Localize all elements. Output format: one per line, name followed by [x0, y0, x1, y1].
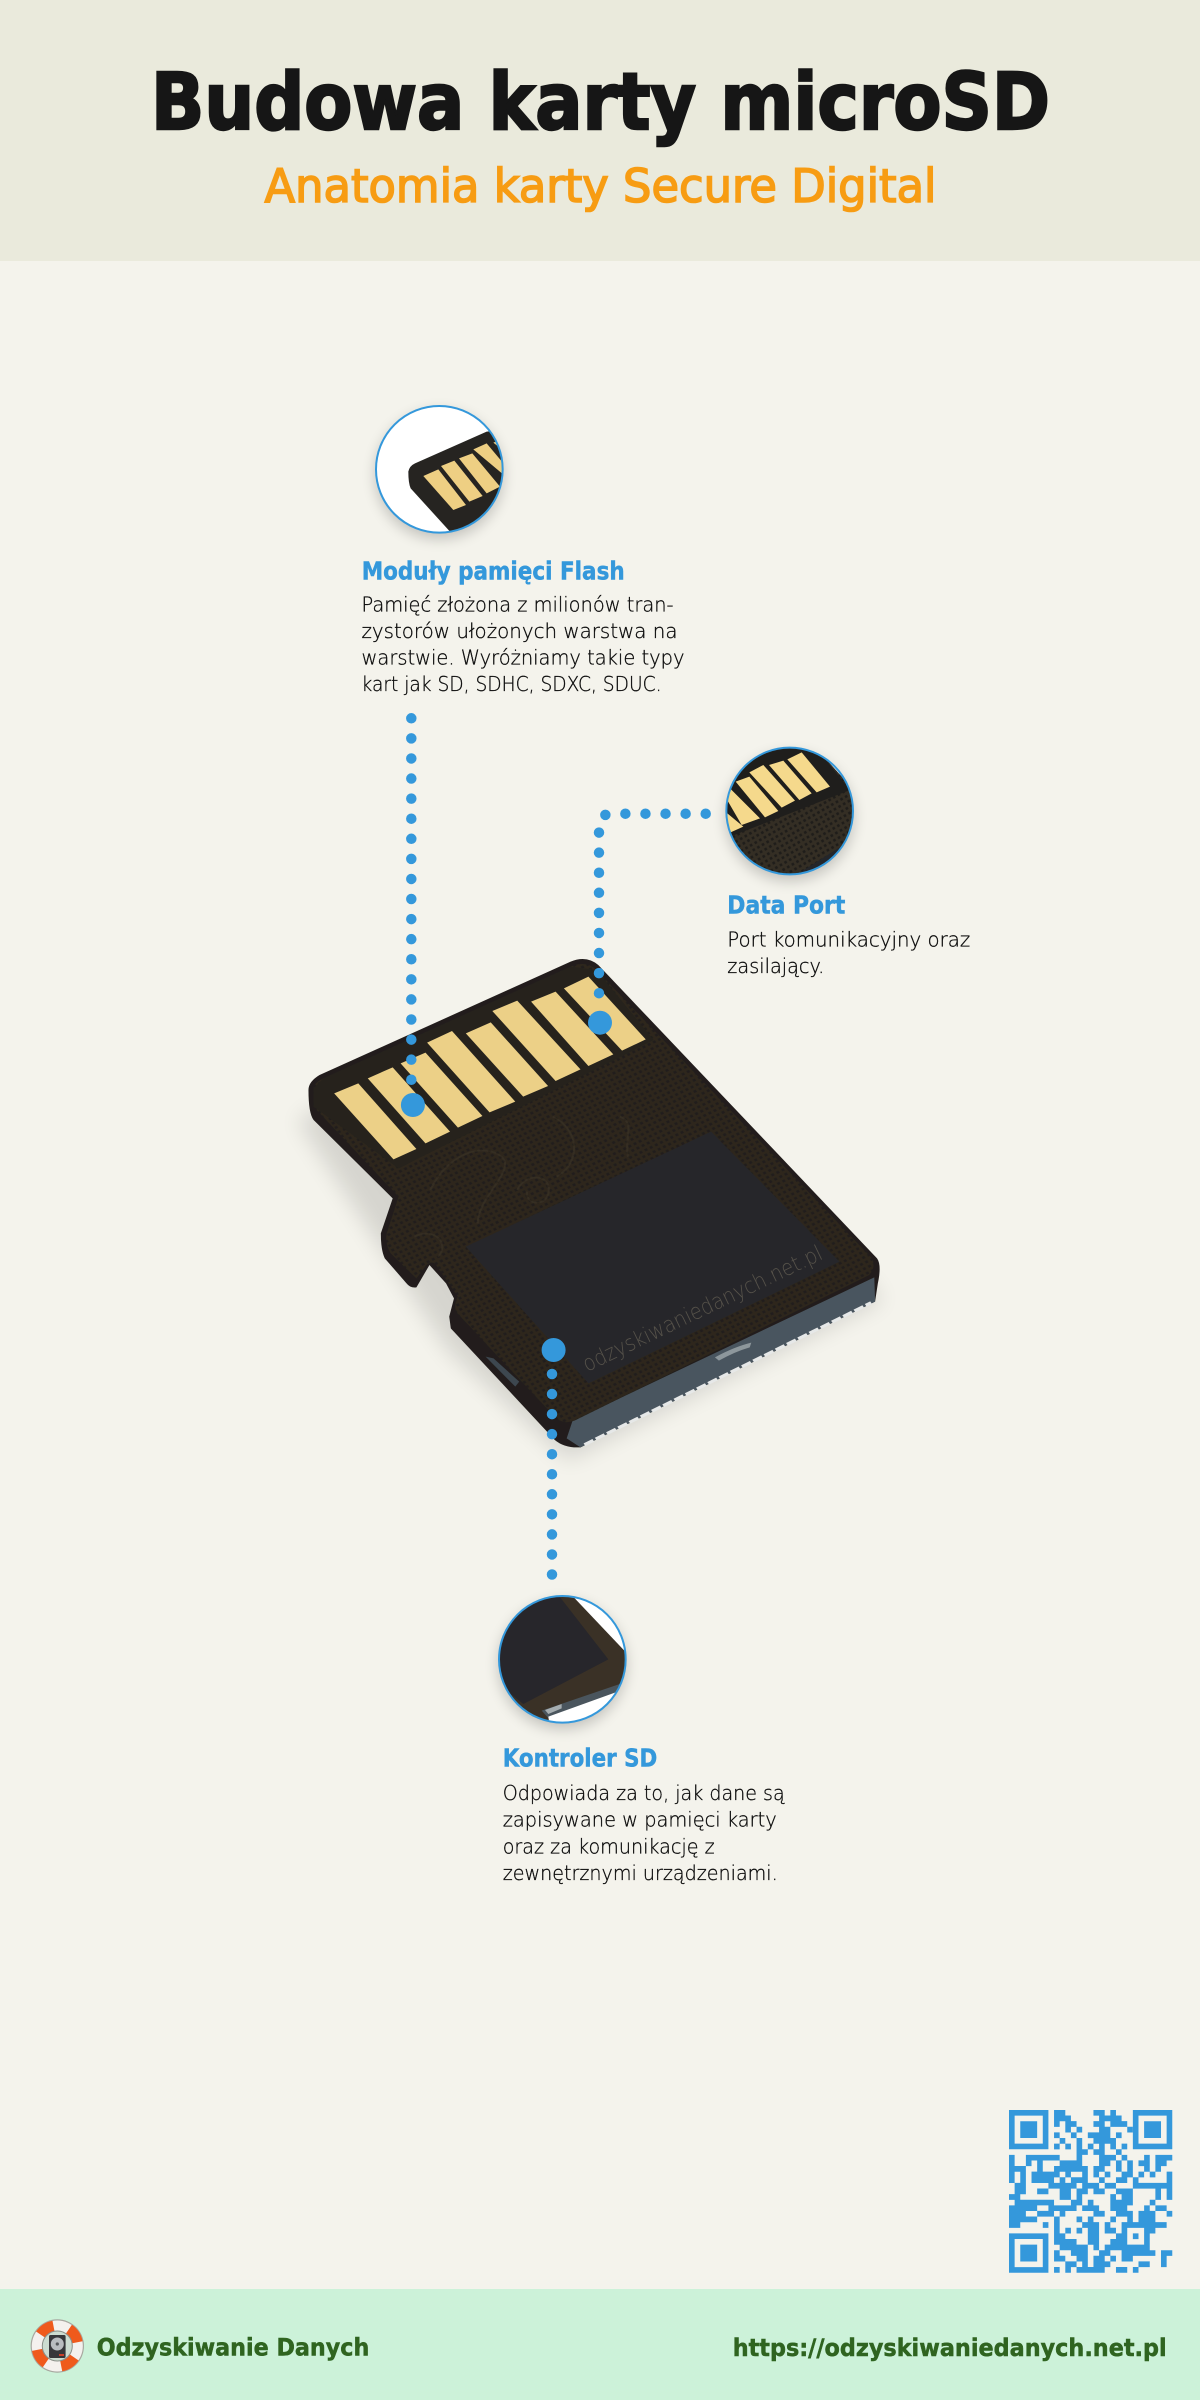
description: Pamięć złożona z milionów tran-: [362, 593, 674, 617]
card top face: [314, 964, 874, 1422]
chip: [466, 1132, 839, 1383]
icon: controller close-up: [493, 1593, 630, 1728]
description: zewnętrznymi urządzeniami.: [503, 1861, 778, 1885]
description: [727, 928, 970, 978]
edge slot: [486, 1357, 519, 1387]
description: Odpowiada za to, jak dane są: [503, 1781, 785, 1805]
callout: SD controller: [493, 1593, 785, 1885]
heading: Moduły pamięci Flash: [362, 556, 625, 585]
callout: data port: [720, 747, 970, 978]
description: zapisywane w pamięci karty: [503, 1808, 777, 1832]
microSD card illustration: [298, 959, 883, 1460]
icon: data port close-up: [720, 747, 857, 877]
plain contact strip: [314, 967, 654, 1168]
callout: flash modules: [362, 406, 684, 696]
brand name: Odzyskiwanie Danych: [97, 2334, 369, 2362]
contact 7: [531, 992, 613, 1066]
header band: [0, 0, 1200, 261]
title: Budowa karty microSD: [151, 58, 1050, 148]
footer band: [0, 2289, 1200, 2400]
description: kart jak SD, SDHC, SDXC, SDUC.: [362, 672, 662, 696]
description: Port komunikacyjny oraz: [727, 928, 970, 952]
contact 5: [466, 1022, 548, 1097]
website address: https://odzyskiwaniedanych.net.pl: [733, 2334, 1167, 2362]
card side edge: [567, 1277, 875, 1447]
card body silhouette: [308, 959, 880, 1447]
contact 4: [427, 1031, 515, 1112]
dotted connector: data port: [588, 814, 706, 1035]
dotted connector: flash: [401, 718, 425, 1117]
contact 3: [401, 1053, 482, 1128]
subtitle: Anatomia karty Secure Digital: [264, 159, 936, 213]
dotted connector: controller: [542, 1338, 566, 1578]
description: warstwie. Wyróżniamy takie typy: [362, 645, 684, 669]
description: [503, 1781, 785, 1885]
contact 2: [368, 1067, 450, 1143]
QR code: [1009, 2110, 1172, 2273]
circle shadow: [375, 411, 503, 539]
description: zasilający.: [727, 954, 824, 978]
edge highlight: [584, 1303, 871, 1445]
description: zystorów ułożonych warstwa na: [362, 619, 678, 643]
watermark: odzyskiwaniedanych.net.pl: [579, 1241, 827, 1377]
heading: Kontroler SD: [503, 1744, 657, 1773]
contact 8: [564, 977, 646, 1051]
description: oraz za komunikację z: [503, 1834, 715, 1858]
edge notch: [715, 1343, 751, 1361]
circuit trace pattern: [414, 1117, 629, 1257]
description: [362, 593, 684, 696]
contact 1: [334, 1083, 416, 1159]
card shadow: [298, 980, 883, 1460]
icon: lifebuoy logo: [31, 2319, 84, 2373]
circle shadow: [726, 753, 854, 881]
contact 6: [492, 1001, 581, 1081]
heading: Data Port: [727, 890, 845, 919]
icon: contacts close-up: [376, 406, 507, 537]
circle shadow: [498, 1601, 626, 1729]
